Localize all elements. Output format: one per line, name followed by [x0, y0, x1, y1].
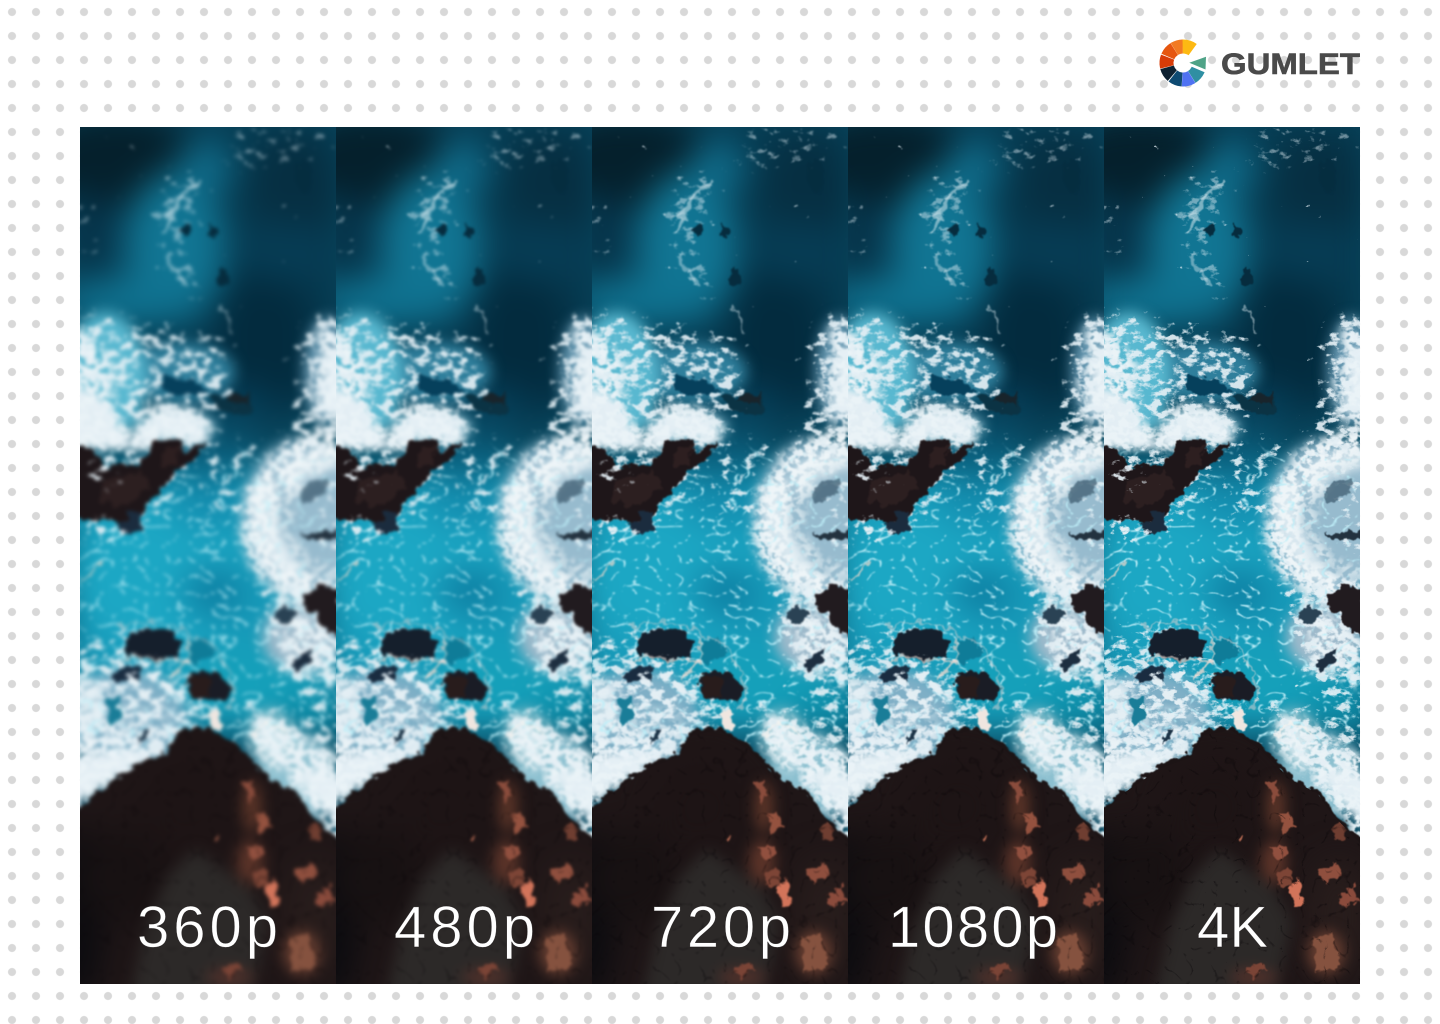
icon: colour wheel [1160, 40, 1206, 86]
panel: 480p [286, 111, 623, 1007]
image: 360p ocean photo [80, 127, 336, 984]
panel: 1080p [798, 111, 1135, 1007]
image: 480p ocean photo [336, 127, 592, 984]
wordmark: GUMLET [1221, 48, 1360, 81]
panel: 360p [30, 111, 367, 1007]
label: 1080p: 1080p [888, 895, 1058, 960]
image: 4K ocean photo [1104, 127, 1360, 984]
image: 720p ocean photo [592, 127, 848, 984]
image: 1080p ocean photo [848, 127, 1104, 984]
Gumlet logo [1160, 40, 1360, 86]
label: 360p: 360p [137, 895, 278, 960]
label: 4K: 4K [1197, 895, 1268, 960]
label: 720p: 720p [651, 895, 791, 960]
label: 480p: 480p [394, 895, 535, 960]
panel: 720p [542, 111, 879, 1007]
panel: 4K [1054, 111, 1391, 1007]
